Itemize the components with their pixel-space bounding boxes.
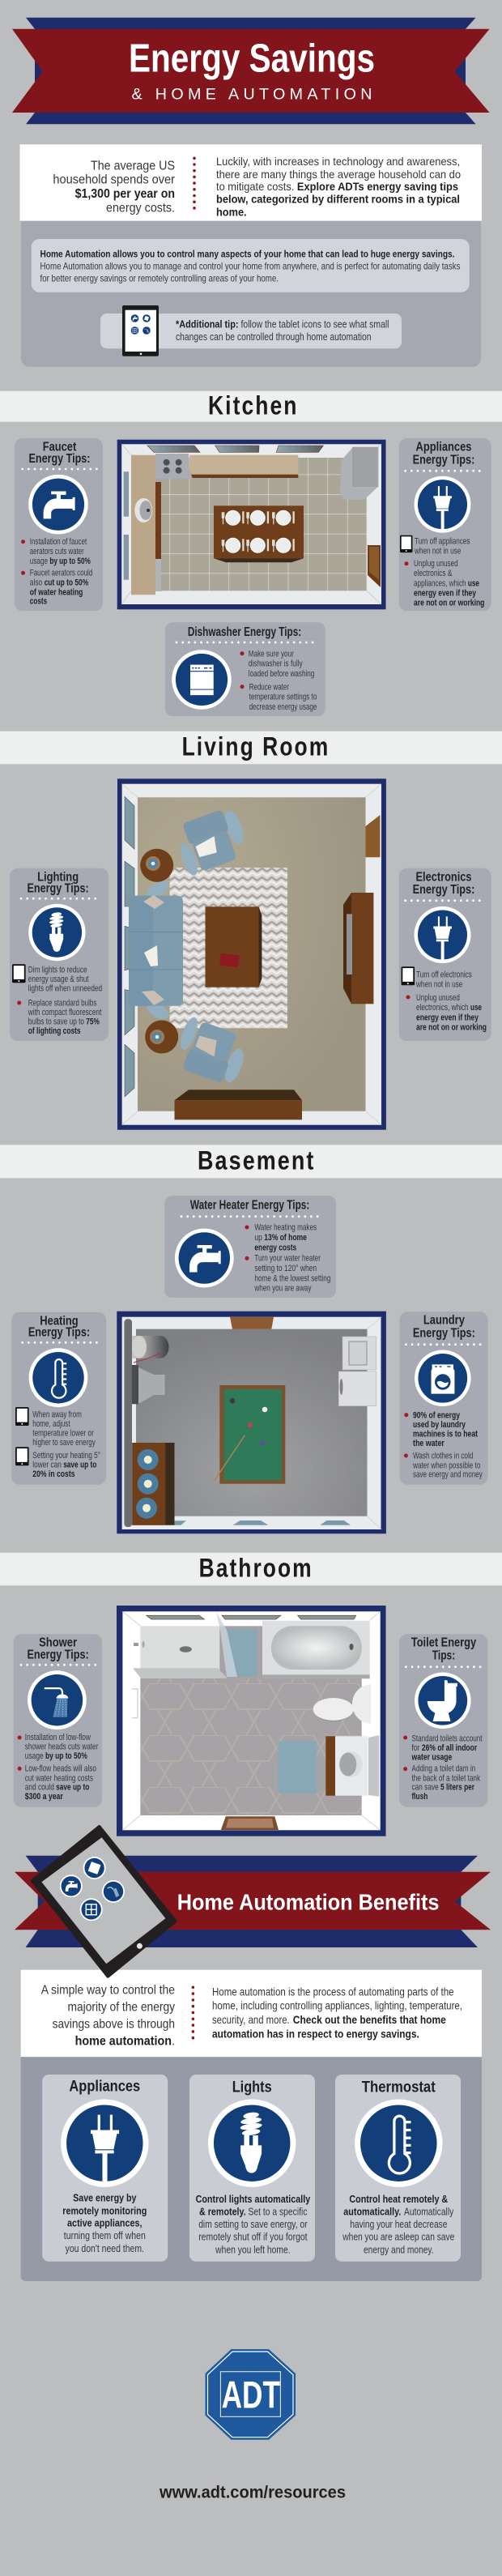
panel: shower tips xyxy=(14,1634,102,1807)
panel: appliances tips xyxy=(399,438,491,611)
large tablet illustration xyxy=(32,1827,175,1977)
panel: heating tips: When away from xyxy=(32,1410,82,1420)
panel: laundry tips: used by laundry xyxy=(413,1420,466,1430)
panel: appliances tips: Unplug unused xyxy=(414,559,458,569)
panel: laundry tips: water when possible to xyxy=(412,1461,480,1470)
living room floor plan xyxy=(117,778,386,1130)
intro panel: benefits xyxy=(21,1970,482,2057)
panel: shower tips: usage by up to 50% xyxy=(25,1751,87,1761)
callout: home automation xyxy=(32,239,470,292)
section: basement xyxy=(0,1145,502,1533)
washer and dryer xyxy=(338,1337,376,1406)
panel: water heater tips xyxy=(164,1196,336,1298)
intro text xyxy=(216,155,461,219)
card: appliances: Save energy by xyxy=(73,2192,136,2203)
panel: electronics tips: electronics, which use xyxy=(416,1003,482,1013)
panel: shower tips: and could save up to xyxy=(25,1783,90,1793)
intro statistic: The average US xyxy=(91,159,175,173)
panel: lighting tips: with compact fluorescent xyxy=(28,1008,101,1017)
intro statistic xyxy=(53,159,175,215)
kitchen floor plan xyxy=(117,440,385,609)
panel: appliances tips: appliances, which use xyxy=(414,578,479,588)
panel: electronics tips: Electronics xyxy=(416,870,472,884)
tv stand xyxy=(343,893,373,1004)
panel: dishwasher tips: Make sure your xyxy=(249,649,294,659)
callout: additional tip: changes can be controlled through home automation xyxy=(176,331,371,343)
panel: shower tips: Installation of low-flow xyxy=(25,1733,91,1742)
panel: heating tips: Heating xyxy=(40,1314,79,1328)
panel: water heater tips: Water Heater Energy Tips: xyxy=(190,1199,309,1213)
panel: shower tips: cut water heating costs xyxy=(25,1773,93,1783)
card: lights: dim setting to save energy, or xyxy=(198,2219,308,2230)
side table bottom xyxy=(145,1021,178,1053)
panel: water heater tips: when you are away xyxy=(254,1283,312,1293)
panel: dishwasher tips xyxy=(165,622,325,716)
icon: plug xyxy=(61,2100,149,2187)
panel: lighting tips: energy usage & shut xyxy=(28,975,88,984)
chair top xyxy=(171,805,252,877)
speaker shelf xyxy=(132,1443,175,1525)
card: appliances: active appliances, xyxy=(67,2217,143,2228)
card: lights: remotely shut off if you forgot xyxy=(198,2232,308,2243)
panel: shower tips: $300 a year xyxy=(25,1792,63,1802)
card: appliances: Appliances xyxy=(69,2079,140,2096)
panel: laundry tips: Laundry xyxy=(423,1313,465,1327)
section: bathroom xyxy=(0,1553,502,1836)
icon: washing machine xyxy=(415,1350,471,1406)
section: kitchen xyxy=(0,391,502,716)
panel: water heater tips: up 13% of home xyxy=(254,1233,307,1243)
panel: appliances tips: electronics & xyxy=(414,569,453,578)
panel: dishwasher tips: decrease energy usage xyxy=(249,702,317,712)
panel: faucet tips: also cut up to 50% xyxy=(30,578,88,588)
title banner xyxy=(12,18,490,124)
icon: faucet xyxy=(175,1229,234,1287)
rug xyxy=(170,868,287,1028)
card: lights: when you left home. xyxy=(215,2244,291,2255)
card: lights: & remotely. xyxy=(199,2207,246,2218)
heading: living room: Living Room xyxy=(182,731,330,761)
card: appliances: you don't need them. xyxy=(66,2243,144,2254)
side table top xyxy=(140,849,173,882)
icon: bulb xyxy=(28,904,86,961)
panel: dishwasher tips: Dishwasher Energy Tips: xyxy=(188,625,301,639)
chair bottom xyxy=(171,1016,252,1088)
panel: electronics tips xyxy=(399,868,491,1041)
coffee table xyxy=(206,906,262,987)
panel: lighting tips: of lighting costs xyxy=(28,1026,81,1036)
card: lights: Set to a specific xyxy=(248,2207,308,2218)
panel: toilet tips: flush xyxy=(411,1792,428,1802)
panel: faucet tips: aerators cuts water xyxy=(30,547,84,557)
heading: kitchen xyxy=(0,391,502,422)
panel: electronics tips: energy even if they xyxy=(416,1013,479,1022)
panel: appliances tips: energy even if they xyxy=(414,589,477,599)
intro description: security, and more. xyxy=(212,2013,290,2026)
panel: heating tips: Energy Tips: xyxy=(28,1326,90,1340)
panel: laundry tips: machines is to heat xyxy=(413,1429,478,1439)
panel: laundry tips: the water xyxy=(413,1439,445,1448)
card: appliances: turning them off when xyxy=(64,2230,146,2241)
card: thermostat: Automatically xyxy=(404,2207,454,2218)
icon: tablet xyxy=(402,966,415,985)
intro statement xyxy=(41,1984,175,2048)
panel: heating tips xyxy=(11,1312,106,1485)
pool table xyxy=(215,1385,285,1484)
subtitle: & HOME AUTOMATION xyxy=(131,86,372,104)
panel: toilet tips: Tips: xyxy=(432,1649,455,1663)
card: appliances xyxy=(42,2075,168,2262)
banner: benefits: Home Automation Benefits xyxy=(177,1889,439,1914)
icon: dishwasher xyxy=(172,650,232,710)
panel: electronics tips: Unplug unused xyxy=(416,993,460,1003)
panel: toilet tips: the back of a toilet tank xyxy=(411,1773,480,1783)
panel: toilet tips: can save 5 liters per xyxy=(411,1783,475,1793)
panel: dishwasher tips: dishwasher is fully xyxy=(249,659,303,669)
panel: lighting tips: lights off when unneeded xyxy=(28,983,102,993)
heading: bathroom xyxy=(0,1553,502,1585)
card: appliances: remotely monitoring xyxy=(62,2205,147,2216)
panel: water heater tips: home & the lowest setting xyxy=(254,1273,330,1283)
icon: shower xyxy=(28,1670,87,1729)
heading: basement xyxy=(0,1145,502,1178)
panel: faucet tips: costs xyxy=(30,597,47,607)
footer url: www.adt.com/resources xyxy=(159,2483,346,2501)
panel: water heater tips: energy costs xyxy=(254,1243,296,1252)
card: thermostat: Control heat remotely & xyxy=(349,2194,448,2205)
panel: laundry tips: 90% of energy xyxy=(413,1410,461,1420)
intro statement: home automation. xyxy=(75,2034,175,2048)
kitchen table xyxy=(214,505,304,562)
heading: living room xyxy=(0,731,502,764)
bath mat xyxy=(278,1741,317,1793)
panel: toilet tips: water usage xyxy=(411,1752,452,1762)
intro statement: majority of the energy xyxy=(68,2000,175,2014)
card: thermostat xyxy=(335,2075,461,2262)
title: Energy Savings xyxy=(129,36,375,80)
intro text: home. xyxy=(216,206,247,219)
icon: tablet xyxy=(122,305,159,356)
panel: home automation summary xyxy=(21,221,481,367)
panel: faucet tips: usage by up to 50% xyxy=(30,557,91,566)
panel: heating tips: 20% in costs xyxy=(32,1469,74,1479)
panel: laundry tips: Wash clothes in cold xyxy=(413,1452,473,1461)
intro text: to mitigate costs. Explore ADTs energy saving tips xyxy=(216,180,458,193)
callout: additional tip xyxy=(100,313,402,348)
panel: heating tips: higher to save energy xyxy=(32,1438,96,1448)
icon: bulb xyxy=(208,2100,296,2187)
callout: additional tip: *Additional tip: xyxy=(176,318,238,330)
icon: toilet xyxy=(415,1672,471,1729)
icon: tablet xyxy=(400,535,412,552)
card: thermostat: Thermostat xyxy=(362,2079,436,2096)
panel: lighting tips: Replace standard bulbs xyxy=(28,998,97,1008)
basement floor plan xyxy=(117,1311,386,1533)
panel: shower tips: Shower xyxy=(39,1636,77,1650)
panel: shower tips: Low-flow heads will also xyxy=(25,1764,96,1774)
shower xyxy=(133,1612,257,1678)
card: thermostat: when you are asleep can save xyxy=(342,2232,454,2243)
icon: thermometer xyxy=(355,2100,442,2187)
panel: appliances tips: Appliances xyxy=(416,441,472,454)
panel: heating tips: Setting your heating 5° xyxy=(32,1451,100,1461)
panel: faucet tips: Faucet xyxy=(43,441,77,454)
intro statement: savings above is through xyxy=(53,2017,175,2031)
card: thermostat: automatically. xyxy=(343,2207,401,2218)
intro panel xyxy=(19,144,482,221)
intro description: automation has in respect to energy savings. xyxy=(212,2027,419,2040)
panel: dishwasher tips: Reduce water xyxy=(249,682,289,692)
panel: electronics tips: when not in use xyxy=(415,979,462,989)
panel: lighting tips: Dim lights to reduce xyxy=(28,965,87,975)
icon: faucet xyxy=(28,475,88,535)
panel: toilet tips xyxy=(399,1634,487,1807)
panel: toilet tips: for 26% of all indoor xyxy=(411,1743,478,1753)
panel: lighting tips: Energy Tips: xyxy=(27,881,89,895)
panel: water heater tips: setting to 120° when xyxy=(254,1264,317,1273)
water heater xyxy=(132,1336,168,1363)
heading: bathroom: Bathroom xyxy=(199,1554,313,1583)
console xyxy=(175,1090,302,1120)
intro description: Check out the benefits that home xyxy=(293,2013,446,2026)
panel: faucet tips: of water heating xyxy=(30,587,83,597)
panel: lighting tips: Lighting xyxy=(37,870,79,884)
intro statistic: energy costs. xyxy=(106,201,175,215)
panel: lighting tips xyxy=(10,868,108,1041)
panel: electronics tips: Energy Tips: xyxy=(413,883,474,897)
heading: basement: Basement xyxy=(198,1145,316,1175)
panel: shower tips: Energy Tips: xyxy=(27,1648,89,1661)
intro text: Luckily, with increases in technology and awareness, xyxy=(216,155,460,168)
vanity xyxy=(325,1735,379,1797)
panel: water heater tips: Turn your water heater xyxy=(254,1254,321,1264)
intro statistic: household spends over xyxy=(53,173,175,187)
icon: thermometer xyxy=(29,1348,87,1407)
panel: laundry tips: Energy Tips: xyxy=(413,1326,475,1340)
banner: benefits xyxy=(15,1856,491,1947)
panel: appliances tips: Energy Tips: xyxy=(413,453,474,467)
card: lights: Control lights automatically xyxy=(196,2194,310,2205)
panel: faucet tips: Faucet aerators could xyxy=(30,569,92,578)
panel: laundry tips xyxy=(400,1311,488,1485)
intro statistic: $1,300 per year on xyxy=(75,187,175,201)
sofa xyxy=(129,878,183,1022)
furnace xyxy=(132,1365,165,1404)
panel: water heater tips: Water heating makes xyxy=(254,1223,317,1233)
panel: appliances tips: Turn off appliances xyxy=(415,537,470,547)
intro text: below, categorized by different rooms in a typical xyxy=(216,193,460,206)
panel: appliances tips: when not in use xyxy=(414,547,461,557)
panel: faucet tips: Installation of faucet xyxy=(30,537,87,547)
panel: shower tips: shower heads cuts water xyxy=(25,1742,99,1751)
card: lights: Lights xyxy=(232,2079,272,2096)
icon: tablet xyxy=(15,1407,29,1426)
panel: dishwasher tips: loaded before washing xyxy=(249,669,314,679)
panel: dishwasher tips: temperature settings to xyxy=(249,693,317,702)
heading: kitchen: Kitchen xyxy=(208,391,298,420)
panel: lighting tips: bulbs to save up to 75% xyxy=(28,1017,100,1026)
panel: faucet tips xyxy=(15,438,103,611)
intro text: there are many things the average household can do xyxy=(216,168,461,181)
icon: tablet xyxy=(15,1447,29,1465)
intro description xyxy=(212,1985,462,2040)
card: lights xyxy=(189,2075,315,2262)
card: thermostat: having your heat decrease xyxy=(350,2219,447,2230)
panel: faucet tips: Energy Tips: xyxy=(29,452,91,466)
icon: plug xyxy=(415,906,471,963)
logo: ADT xyxy=(206,2349,296,2440)
panel: heating tips: home, adjust xyxy=(32,1419,70,1429)
panel: toilet tips: Toilet Energy xyxy=(411,1636,476,1650)
icon: tablet xyxy=(12,964,26,983)
panel: heating tips: lower can save up to xyxy=(32,1461,97,1470)
intro statement: A simple way to control the xyxy=(41,1984,175,1998)
panel: heating tips: temperature lower or xyxy=(32,1429,94,1439)
toilet xyxy=(313,1684,371,1724)
bathroom floor plan xyxy=(117,1606,385,1836)
panel: electronics tips: Turn off electronics xyxy=(416,970,472,979)
callout: additional tip: follow the tablet icons to see what small xyxy=(241,318,389,330)
panel: toilet tips: Adding a toilet dam in xyxy=(411,1764,475,1774)
section: home automation benefits xyxy=(15,1827,491,2281)
icon: plug xyxy=(415,476,471,533)
bathtub xyxy=(262,1621,370,1678)
panel: benefits xyxy=(21,2057,482,2281)
section: living room xyxy=(0,731,502,1130)
intro description: Home automation is the process of automating parts of the xyxy=(212,1985,454,1998)
card: thermostat: energy and money. xyxy=(364,2244,434,2255)
logo: ADT: ADT xyxy=(222,2373,280,2416)
callout: home automation: for better energy savings or remotely controlling areas of your home. xyxy=(40,272,279,284)
